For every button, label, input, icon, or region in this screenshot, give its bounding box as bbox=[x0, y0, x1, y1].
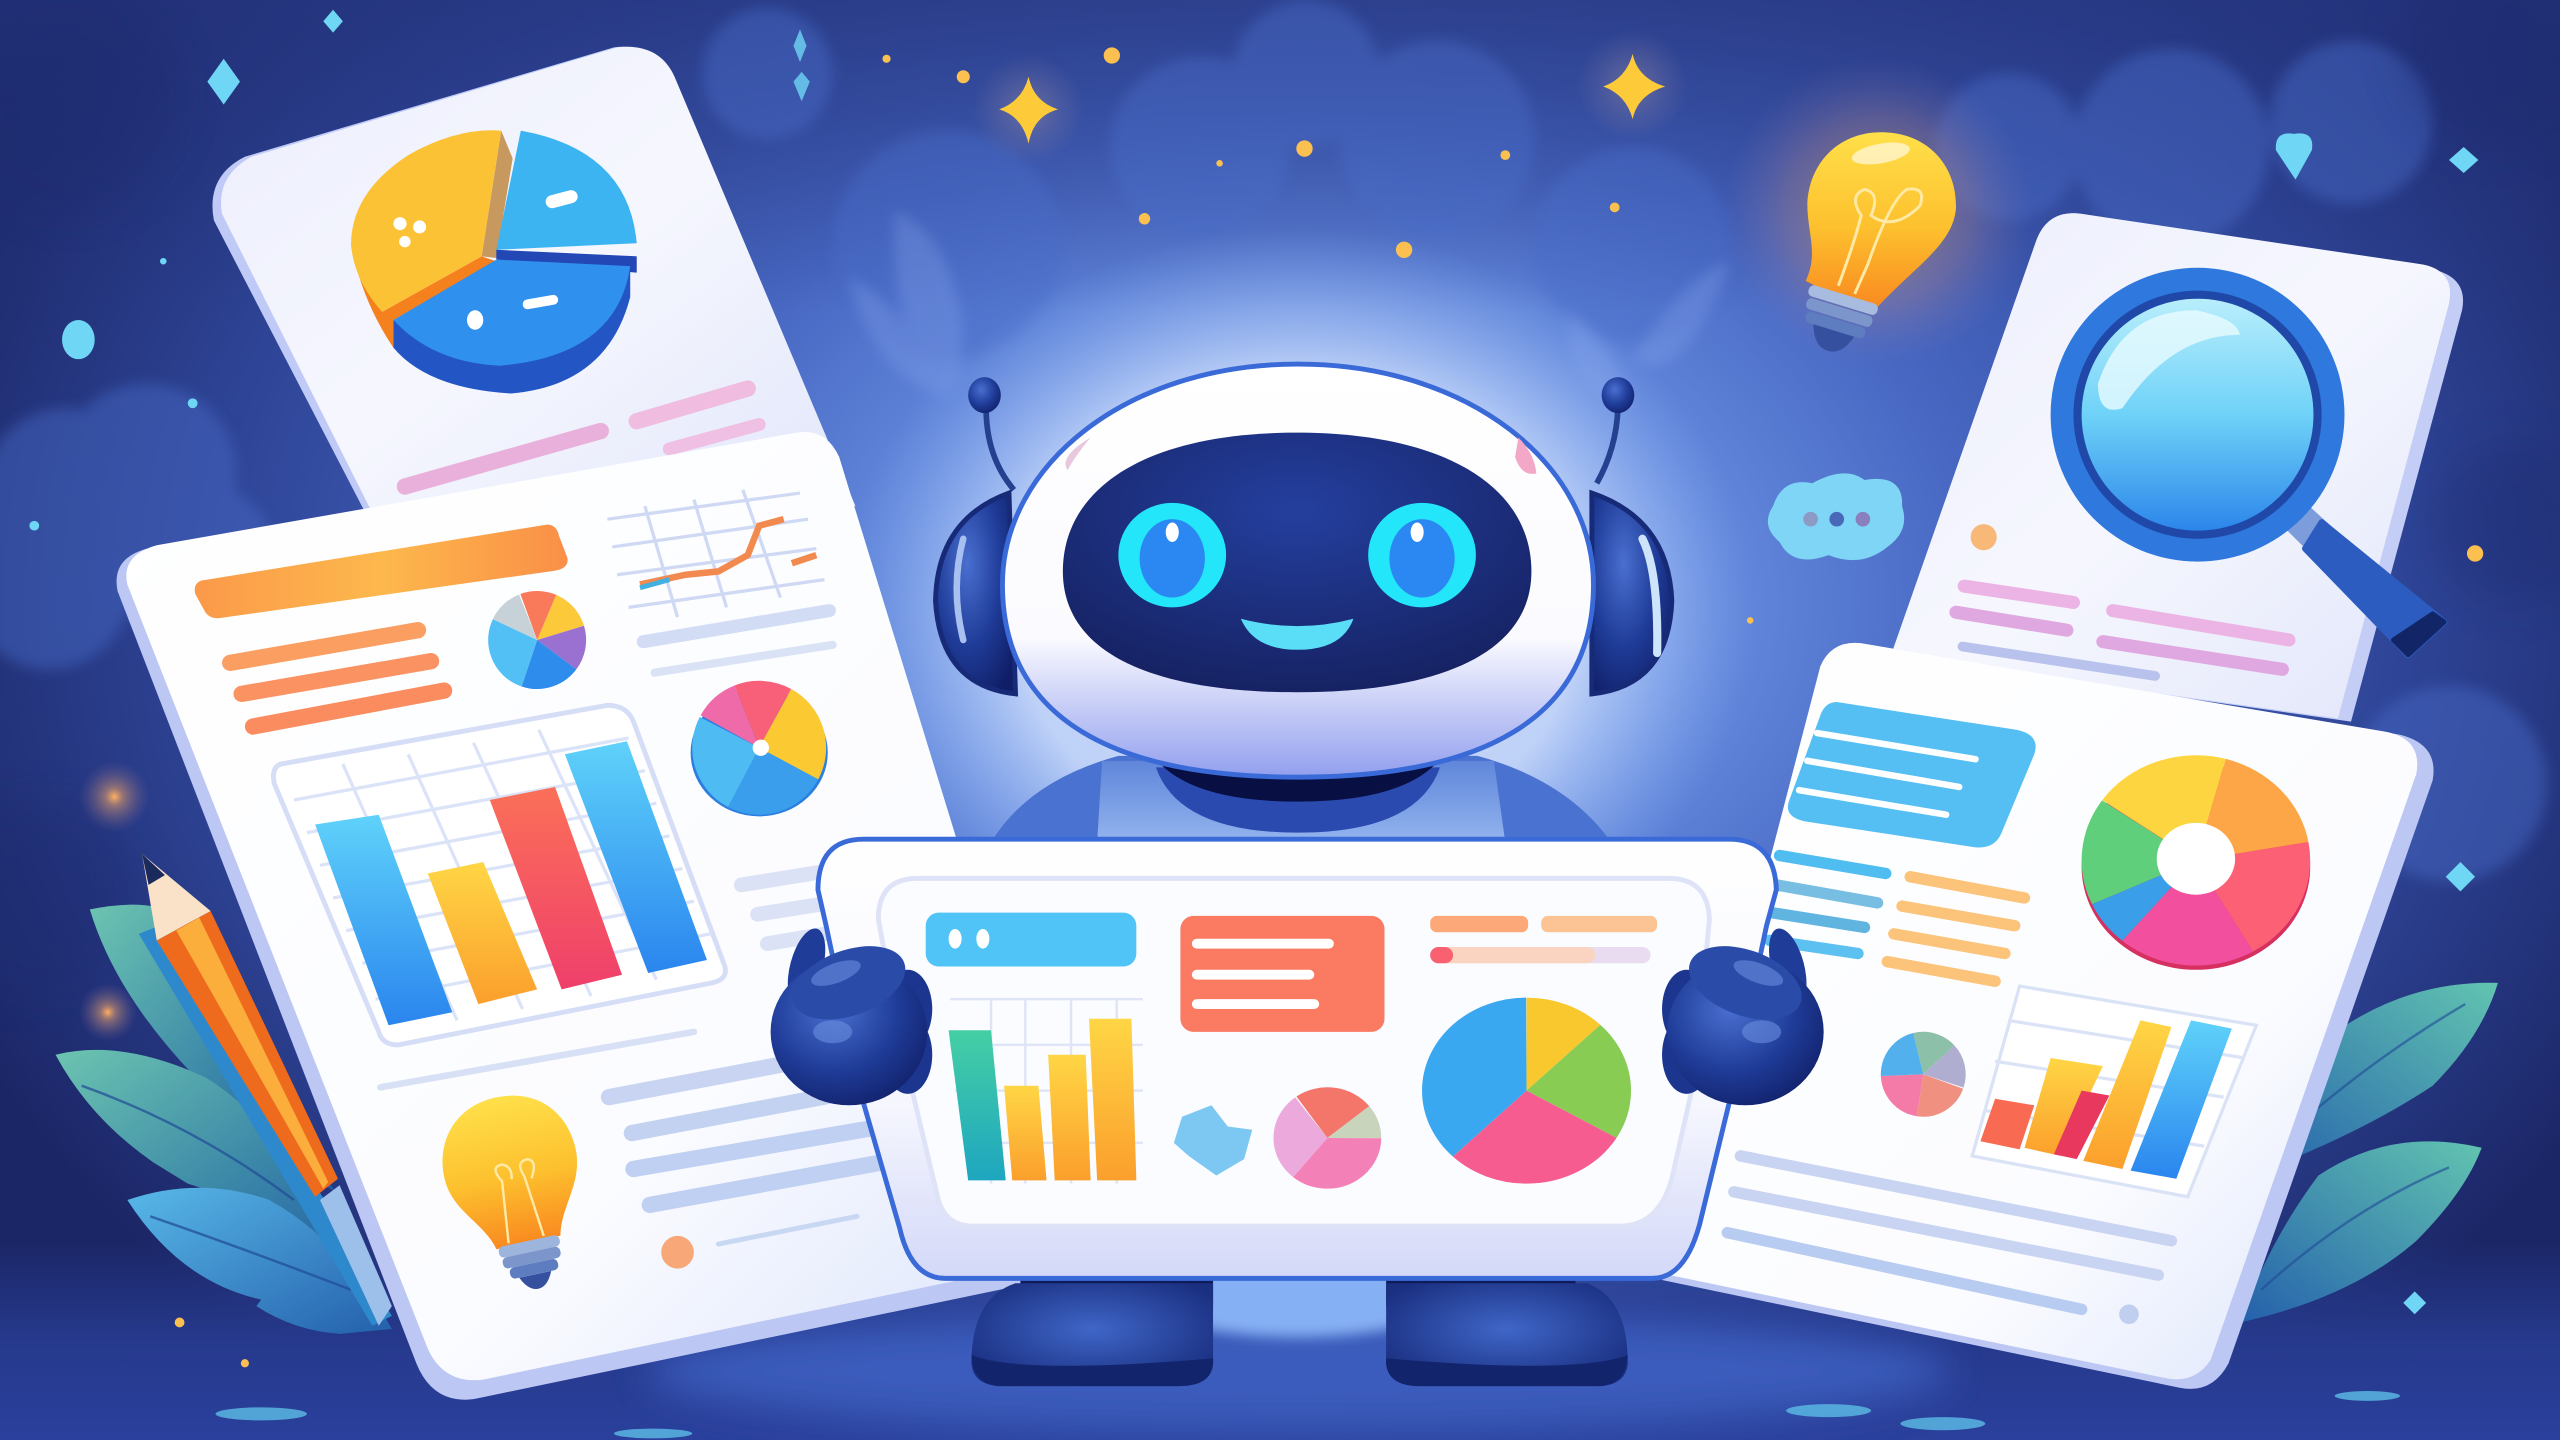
chart: small line graph bbox=[607, 490, 824, 617]
header bar bbox=[199, 529, 563, 614]
leaves: left plant bbox=[56, 905, 392, 1334]
robot legs and feet bbox=[971, 1267, 1628, 1386]
eye: right bbox=[1368, 503, 1476, 607]
headphones bbox=[936, 493, 1672, 694]
red note card bbox=[1180, 916, 1384, 1032]
icon: floating light bulb bbox=[1722, 57, 2033, 367]
chart: small pie bbox=[1896, 1047, 1950, 1101]
robot left hand bbox=[771, 932, 932, 1105]
pencil bbox=[139, 854, 392, 1326]
eye: left bbox=[1118, 503, 1226, 607]
robot halo glow bbox=[841, 229, 1755, 996]
chart: 3D pie bbox=[351, 130, 637, 393]
text lines bbox=[405, 389, 759, 487]
head shell bbox=[1002, 364, 1593, 777]
face visor bbox=[1063, 433, 1531, 692]
chart: large pie bbox=[1474, 1044, 1579, 1137]
chart: pink pie bbox=[1290, 1103, 1365, 1173]
text lines: two columns bbox=[1770, 856, 2024, 981]
text lines: lower bbox=[1727, 1156, 2171, 1309]
panel: left report bbox=[117, 432, 1084, 1400]
leaves: right plant bbox=[2240, 983, 2498, 1322]
panel: right report bbox=[1662, 643, 2434, 1389]
panel: magnifier card bbox=[1891, 213, 2463, 722]
icon: floating speech cloud bbox=[1768, 473, 1904, 560]
left foot bbox=[971, 1283, 1213, 1386]
icon: magnifying glass bbox=[2051, 268, 2444, 655]
header chip bbox=[926, 913, 1136, 967]
panel: pie chart card bbox=[212, 47, 856, 539]
robot right hand, back part bbox=[1762, 924, 1814, 1009]
chart: bars bbox=[949, 999, 1143, 1184]
text lines: top right bbox=[1430, 916, 1657, 963]
robot right hand bbox=[1662, 932, 1824, 1105]
chart: bar chart bbox=[273, 705, 725, 1045]
center dashboard panel bbox=[818, 839, 1776, 1278]
chart: donut bbox=[2082, 764, 2310, 970]
text lines bbox=[1956, 586, 2289, 676]
text lines: grey bbox=[643, 611, 833, 673]
antennae bbox=[968, 377, 1634, 490]
text lines: orange bbox=[230, 630, 444, 727]
smile bbox=[1241, 619, 1353, 650]
chart: small pie bbox=[506, 609, 569, 671]
header block bbox=[1788, 702, 2036, 847]
chart: tilted pie bbox=[691, 689, 828, 816]
right foot bbox=[1386, 1283, 1628, 1386]
robot left hand, back part bbox=[781, 924, 832, 1009]
icon: blue blob bbox=[1174, 1105, 1252, 1176]
robot head bbox=[936, 364, 1672, 777]
text lines: lower bbox=[380, 849, 963, 1244]
icon: light bulb bbox=[430, 1083, 602, 1303]
chart: bar chart bbox=[1972, 986, 2256, 1197]
robot body bbox=[991, 756, 1611, 842]
